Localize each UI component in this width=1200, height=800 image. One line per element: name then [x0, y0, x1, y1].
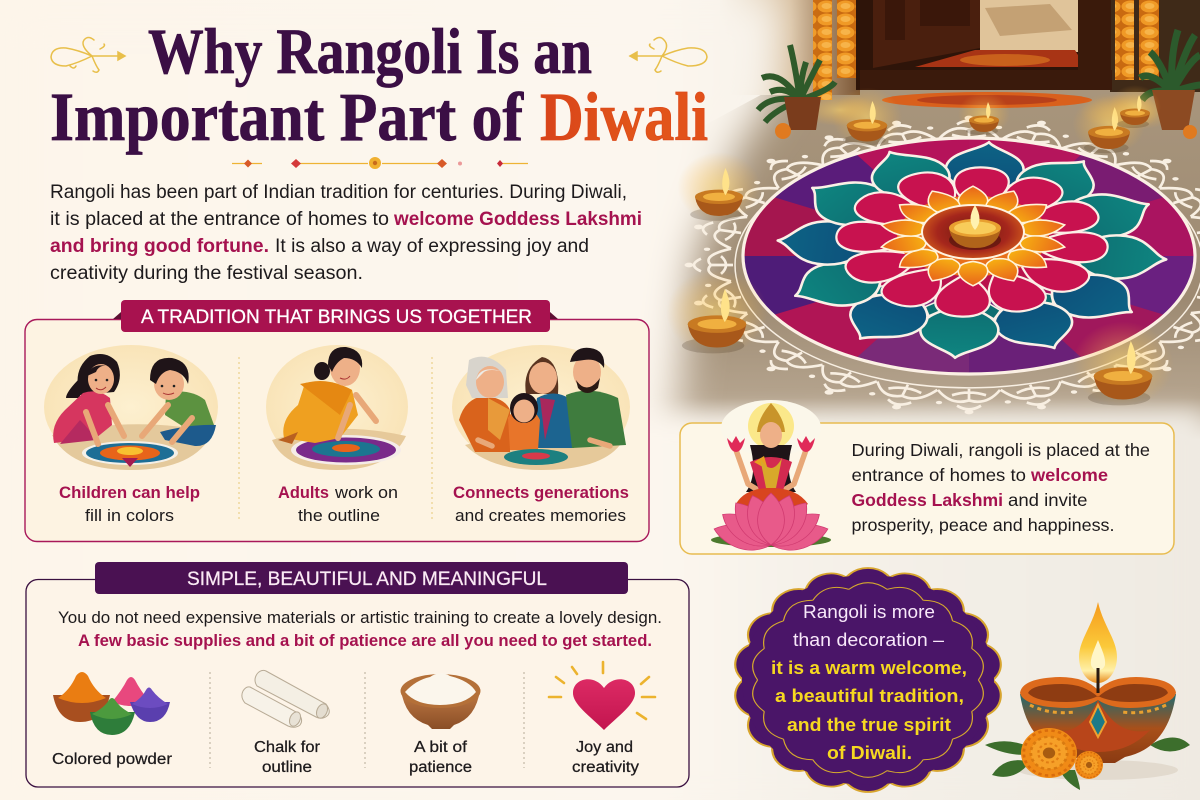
body text: [58, 609, 662, 650]
banner heading: [113, 300, 558, 332]
label: joy: Joy and: [576, 739, 633, 756]
title: Why Rangoli Is an: [148, 16, 592, 88]
kolam outer lace: [610, 88, 1200, 442]
note text: prosperity, peace and happiness.: [852, 515, 1114, 535]
leaves: [985, 738, 1190, 790]
body text: A few basic supplies and a bit of patience are all you need to get started.: [78, 632, 652, 650]
title: [50, 16, 708, 155]
label: children: fill in colors: [85, 507, 174, 525]
petal mat at door: [882, 92, 1092, 108]
label: adults: work on: [334, 484, 398, 502]
label: children: [59, 484, 200, 525]
note text: [852, 440, 1150, 535]
marigolds: [1021, 728, 1077, 778]
banner heading: A TRADITION THAT BRINGS US TOGETHER: [141, 306, 532, 328]
label: adults: Adults: [278, 484, 329, 502]
note text: Goddess Lakshmi: [852, 490, 1003, 510]
panel: goddess lakshmi note: [680, 400, 1174, 556]
right dark wall: [1110, 0, 1200, 92]
centre circle: [922, 205, 1024, 259]
note text: During Diwali, rangoli is placed at the: [852, 440, 1150, 460]
callout badge: more than decoration: [731, 567, 1005, 793]
label: joy: [572, 739, 639, 776]
intro paragraph: and bring good fortune.: [50, 236, 269, 257]
body text: You do not need expensive materials or artistic training to create a lovely design.: [58, 609, 662, 627]
base coloured disc: [717, 124, 1200, 388]
panel: simple, beautiful and meaningful: [26, 562, 689, 787]
outer teal and blue petals: [774, 140, 1170, 360]
banner heading: [95, 562, 628, 594]
label: chalk: outline: [262, 759, 312, 776]
title: Diwali: [540, 79, 708, 155]
badge text: of Diwali.: [827, 742, 912, 763]
badge text: it is a warm welcome,: [771, 657, 967, 678]
badge text: Rangoli is more: [803, 601, 935, 622]
title: Important Part of: [50, 79, 524, 155]
teal diamonds between petals: [846, 180, 1098, 320]
note text: and invite: [1008, 490, 1088, 510]
label: generations: [453, 484, 629, 525]
centre diya: [949, 205, 1001, 250]
banner heading: SIMPLE, BEAUTIFUL AND MEANINGFUL: [187, 569, 547, 590]
badge text: and the true spirit: [787, 714, 951, 735]
label: patience: patience: [409, 759, 472, 776]
dividers: [239, 357, 432, 520]
note text: entrance of homes to: [852, 465, 1026, 485]
icon: heart with rays: [549, 662, 655, 730]
label: children: Children can help: [59, 484, 200, 502]
intro paragraph: Rangoli has been part of Indian tradition for centuries. During Diwali,: [50, 182, 627, 203]
icon: right flourish: [630, 38, 707, 72]
wall: [720, 0, 860, 95]
floor glow: [1080, 94, 1180, 130]
label: coloured powder: Colored powder: [52, 751, 172, 768]
label: joy: creativity: [572, 759, 639, 776]
rangoli artwork: [610, 88, 1200, 442]
icon: coloured powder bowls: [53, 672, 170, 735]
label: generations: and creates memories: [455, 507, 626, 525]
icon: chalk sticks: [242, 670, 330, 728]
inner yellow petals: [878, 186, 1068, 286]
label: generations: Connects generations: [453, 484, 629, 502]
dividers: [210, 672, 524, 768]
panel: a tradition that brings us together: [25, 300, 649, 542]
badge text: [771, 601, 967, 763]
illustration: children filling colours: [44, 345, 218, 470]
middle magenta petals: [834, 166, 1110, 318]
small diyas around rangoli: [666, 85, 1174, 407]
doorway: [856, 0, 1112, 90]
title divider: [232, 157, 528, 169]
label: patience: A bit of: [414, 739, 468, 756]
bowl: [1020, 694, 1176, 763]
label: adults: [278, 484, 398, 525]
marigold garlands: [813, 0, 1159, 100]
label: adults: the outline: [298, 507, 380, 525]
floor: [640, 90, 1200, 440]
intro paragraph: welcome Goddess Lakshmi: [393, 209, 642, 230]
intro paragraph: creativity during the festival season.: [50, 263, 363, 284]
plants and pots: [758, 30, 1200, 139]
intro paragraph: It is also a way of expressing joy and: [275, 236, 589, 257]
intro paragraph: it is placed at the entrance of homes to: [50, 209, 389, 230]
icon: large diya with marigolds: [985, 602, 1190, 790]
label: chalk: Chalk for: [254, 739, 320, 756]
icon: left flourish: [51, 38, 125, 72]
illustration: adult drawing outline: [266, 345, 408, 470]
badge text: than decoration –: [793, 629, 945, 650]
note text: welcome: [1030, 465, 1108, 485]
photo: doorway scene with rangoli: [640, 0, 1200, 440]
icon: flour bowl: [400, 673, 480, 729]
illustration: family together: [452, 345, 630, 470]
intro paragraph: [50, 182, 642, 284]
label: chalk: [254, 739, 320, 776]
badge text: a beautiful tradition,: [775, 685, 964, 706]
flame: [1079, 602, 1117, 683]
rim: [1020, 677, 1176, 708]
label: patience: [409, 739, 472, 776]
icon: goddess lakshmi on lotus: [710, 400, 832, 556]
